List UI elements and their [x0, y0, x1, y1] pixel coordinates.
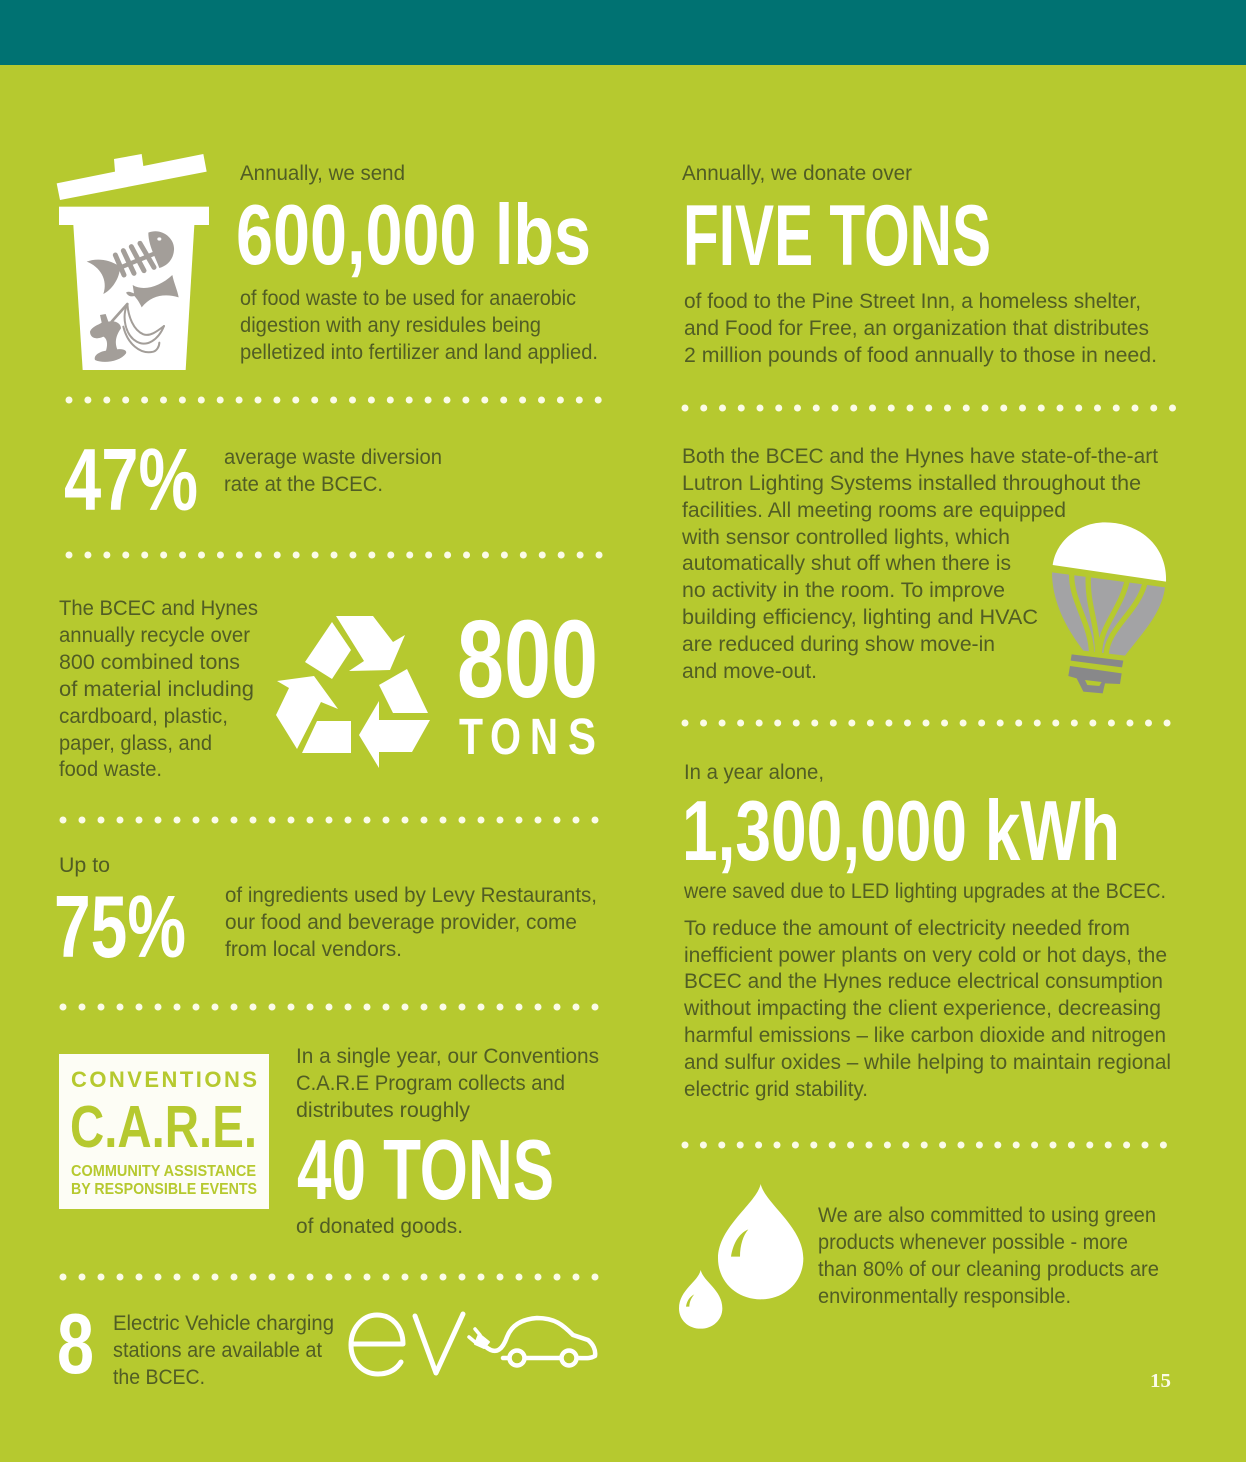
- panel: recycling: [59, 597, 598, 781]
- text: demand reduction description: To reduce the amount of electricity needed from: [684, 917, 1130, 940]
- stat label: tons: S: [568, 708, 596, 765]
- logo: conventions care: C.A.R.E.: [70, 1094, 257, 1160]
- panel: electric vehicles: [57, 1297, 595, 1392]
- text: ingredients description: of ingredients used by Levy Restaurants,: [225, 884, 597, 907]
- text: lighting description: Both the BCEC and the Hynes have state-of-the-art: [682, 445, 1158, 468]
- text: demand reduction description: BCEC and the Hynes reduce electrical consumption: [684, 970, 1163, 993]
- text: lighting description: facilities. All meeting rooms are equipped: [682, 499, 1066, 522]
- text: ev description: stations are available at: [113, 1339, 322, 1362]
- text: cleaning products description: [818, 1204, 1159, 1308]
- text: donation description: [684, 290, 1157, 367]
- text: demand reduction description: without impacting the client experience, decreasing: [683, 997, 1161, 1020]
- text: recycling description: The BCEC and Hynes: [59, 597, 258, 620]
- text: food waste description: pelletized into fertilizer and land applied.: [240, 341, 598, 364]
- text: up to: Up to: [59, 854, 110, 877]
- stat: 40 tons: 40 TONS: [297, 1123, 554, 1218]
- text: lighting description: [681, 445, 1158, 683]
- icon: car with plug: [469, 1318, 595, 1366]
- stat label: tons: T: [459, 708, 483, 765]
- text: demand reduction description: inefficient power plants on very cold or hot days, the: [684, 944, 1167, 967]
- stat: 75%: 75%: [54, 877, 186, 976]
- text: recycling description: cardboard, plastic,: [59, 705, 228, 728]
- text: lighting description: and move-out.: [682, 660, 817, 683]
- panel: food waste: [57, 154, 598, 370]
- text: cleaning products description: We are also committed to using green: [818, 1204, 1156, 1227]
- text: donation description: of food to the Pine Street Inn, a homeless shelter,: [684, 290, 1141, 313]
- text: lighting description: building efficiency, lighting and HVAC: [682, 606, 1038, 629]
- panel: waste diversion: [64, 430, 442, 529]
- text: ev description: the BCEC.: [113, 1366, 205, 1389]
- text: recycling description: annually recycle over: [59, 624, 250, 647]
- text: food waste description: of food waste to be used for anaerobic: [240, 287, 576, 310]
- text: donated goods: of donated goods.: [296, 1215, 463, 1238]
- text: ingredients description: from local vendors.: [225, 938, 402, 961]
- text: lighting description: no activity in the room. To improve: [682, 579, 1005, 602]
- stat: 800: 800: [457, 598, 598, 721]
- text: cleaning products description: than 80% of our cleaning products are: [818, 1258, 1159, 1281]
- text: cleaning products description: products whenever possible - more: [818, 1231, 1128, 1254]
- panel: food donation: [682, 162, 1157, 367]
- text: food waste description: digestion with any residules being: [240, 314, 541, 337]
- text: ingredients description: our food and beverage provider, come: [225, 911, 577, 934]
- text: annually we donate: Annually, we donate over: [682, 162, 912, 185]
- icon: recycling arrows: [276, 616, 430, 768]
- icon: water drops: [679, 1184, 803, 1329]
- icon: ev lettering: [351, 1314, 463, 1374]
- text: donation description: 2 million pounds of food annually to those in need.: [684, 344, 1157, 367]
- logo: conventions care: COMMUNITY ASSISTANCE: [71, 1163, 256, 1180]
- text: demand reduction description: [683, 917, 1171, 1101]
- stat label: tons: [459, 708, 596, 765]
- stat: 600,000 lbs: 600,000 lbs: [236, 188, 591, 283]
- text: donation description: and Food for Free, an organization that distributes: [684, 317, 1149, 340]
- text: demand reduction description: electric grid stability.: [684, 1078, 868, 1101]
- text: care program description: C.A.R.E Program collects and: [296, 1072, 565, 1095]
- text: led upgrades: were saved due to LED lighting upgrades at the BCEC.: [683, 880, 1166, 903]
- icon: trash can with food scraps: [57, 154, 209, 370]
- icon: light bulb: [1052, 522, 1166, 693]
- text: diversion description: [224, 446, 442, 496]
- panel: green cleaning: [679, 1184, 1159, 1329]
- text: diversion description: average waste diversion: [224, 446, 442, 469]
- text: lighting description: are reduced during show move-in: [682, 633, 995, 656]
- stat: 47%: 47%: [64, 430, 198, 529]
- text: recycling description: food waste.: [59, 758, 162, 781]
- panel: local ingredients: [54, 854, 597, 976]
- text: lighting description: automatically shut off when there is: [682, 552, 1011, 575]
- logo: conventions care: CONVENTIONS: [71, 1067, 257, 1092]
- text: demand reduction description: harmful emissions – like carbon dioxide and nitrogen: [684, 1024, 1166, 1047]
- text: diversion description: rate at the BCEC.: [224, 473, 383, 496]
- text: ev description: Electric Vehicle charging: [113, 1312, 334, 1335]
- text: ev description: [113, 1312, 334, 1389]
- logo: conventions care: [59, 1054, 269, 1209]
- text: care program description: In a single year, our Conventions: [296, 1045, 599, 1068]
- panel: conventions care: [59, 1045, 599, 1238]
- stat: five tons: FIVE TONS: [683, 188, 991, 284]
- panel: electricity savings: [682, 761, 1171, 1101]
- panel: lighting systems: [681, 445, 1166, 693]
- text: care program description: distributes roughly: [296, 1099, 471, 1122]
- text: recycling description: of material including: [59, 678, 254, 701]
- stat label: tons: N: [530, 708, 558, 765]
- page number: 15: [1150, 1370, 1171, 1392]
- text: annually we send: Annually, we send: [240, 162, 405, 185]
- text: in a year alone: In a year alone,: [684, 761, 824, 784]
- text: food waste description: [240, 287, 598, 364]
- stat: 1,300,000 kWh: 1,300,000 kWh: [682, 784, 1120, 879]
- text: cleaning products description: environmentally responsible.: [818, 1285, 1071, 1308]
- text: recycling description: [59, 597, 258, 781]
- text: ingredients description: [225, 884, 597, 961]
- text: care program description: [296, 1045, 599, 1122]
- text: lighting description: Lutron Lighting Systems installed throughout the: [682, 472, 1141, 495]
- stat label: tons: O: [490, 708, 521, 765]
- logo: conventions care: BY RESPONSIBLE EVENTS: [71, 1181, 257, 1198]
- text: recycling description: 800 combined tons: [59, 651, 240, 674]
- stat: 8: 8: [57, 1297, 94, 1392]
- text: demand reduction description: and sulfur oxides – while helping to maintain regional: [684, 1051, 1171, 1074]
- text: recycling description: paper, glass, and: [59, 732, 212, 755]
- text: lighting description: with sensor controlled lights, which: [681, 526, 1010, 549]
- header band: [0, 0, 1246, 65]
